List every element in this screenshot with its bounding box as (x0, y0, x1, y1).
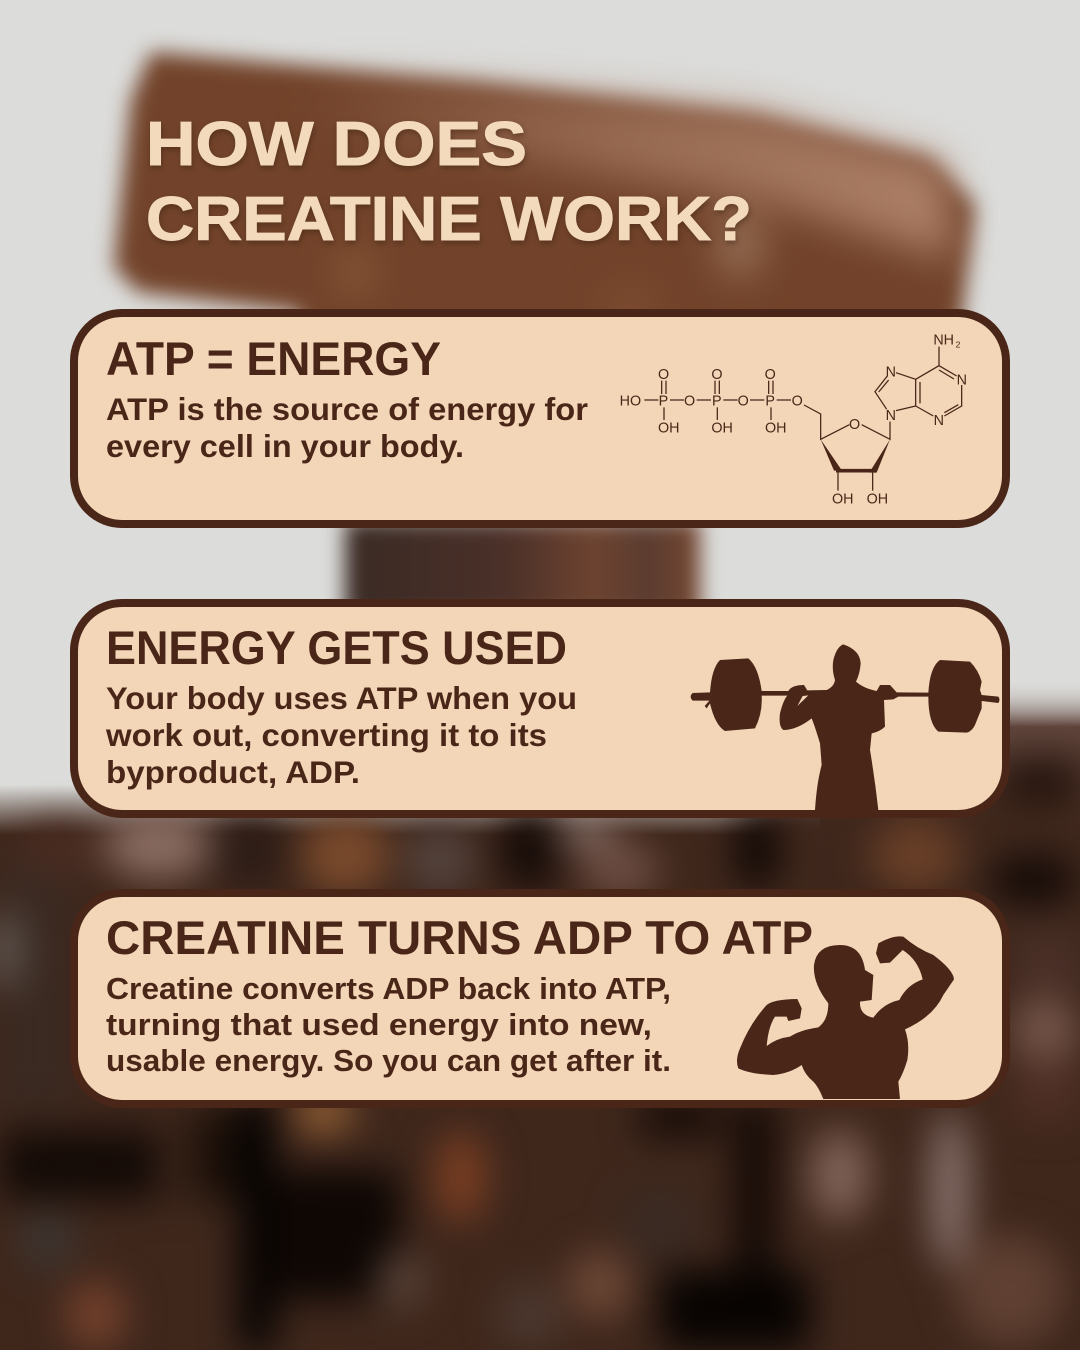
icon: ATP molecule: O (738, 393, 749, 409)
text block: ATP description (106, 391, 588, 464)
text block: ATP use: Your body uses ATP when you (106, 680, 577, 716)
heading: CREATINE TURNS ADP TO ATP: CREATINE TURNS ADP TO ATP (106, 911, 813, 964)
panel: creatine turns ADP to ATP (74, 893, 1006, 1104)
chocolate bar, blurred (114, 52, 975, 335)
text block: ATP description: ATP is the source of energy for (106, 391, 588, 427)
text block: creatine conversion: usable energy. So you can get after it. (106, 1044, 671, 1078)
text block: ATP use: work out, converting it to its (105, 717, 547, 753)
icon: ATP molecule: O (792, 393, 803, 409)
title: HOW DOES (146, 110, 527, 179)
icon: weightlifter silhouette (691, 644, 999, 810)
icon: ATP molecule: P (659, 393, 668, 409)
icon: ATP molecule: O (849, 417, 860, 433)
panel: ATP = energy (74, 313, 1006, 524)
title (146, 110, 752, 254)
icon: ATP molecule: OH (658, 421, 679, 437)
icon: flexing man silhouette (737, 936, 954, 1099)
icon: ATP molecule: O (765, 367, 776, 383)
icon: ATP molecule: N (934, 413, 944, 429)
heading: ATP = ENERGY: ATP = ENERGY (106, 332, 441, 385)
icon: ATP molecule: HO (620, 393, 641, 409)
icon: ATP molecule: NH (933, 333, 954, 349)
text block: ATP use: byproduct, ADP. (106, 754, 360, 790)
icon: ATP molecule (620, 333, 967, 507)
panel: energy gets used (74, 603, 1006, 814)
icon: ATP molecule: O (684, 393, 695, 409)
icon: ATP molecule: N (886, 408, 896, 424)
icon: ATP molecule: O (711, 367, 722, 383)
icon: ATP molecule: P (765, 393, 775, 409)
text block: creatine conversion: turning that used energy into new, (106, 1008, 652, 1042)
icon: ATP molecule: OH (832, 491, 853, 507)
icon: ATP molecule: 2 (956, 339, 961, 349)
icon: ATP molecule: P (712, 393, 722, 409)
icon: ATP molecule: OH (765, 421, 786, 437)
middle chocolate block, blurred (345, 520, 700, 620)
title: CREATINE WORK? (146, 185, 752, 254)
heading: ENERGY GETS USED: ENERGY GETS USED (106, 621, 567, 674)
text block: ATP description: every cell in your body. (106, 428, 464, 464)
icon: ATP molecule: N (957, 373, 967, 389)
text block: ATP use (105, 680, 577, 790)
icon: ATP molecule: OH (711, 421, 733, 437)
icon: ATP molecule: OH (867, 491, 888, 507)
text block: creatine conversion (106, 972, 671, 1078)
icon: ATP molecule: N (886, 365, 896, 381)
text block: creatine conversion: Creatine converts ADP back into ATP, (106, 972, 671, 1006)
icon: ATP molecule: O (658, 367, 669, 383)
lower chocolate pile, blurred (0, 760, 1080, 1350)
